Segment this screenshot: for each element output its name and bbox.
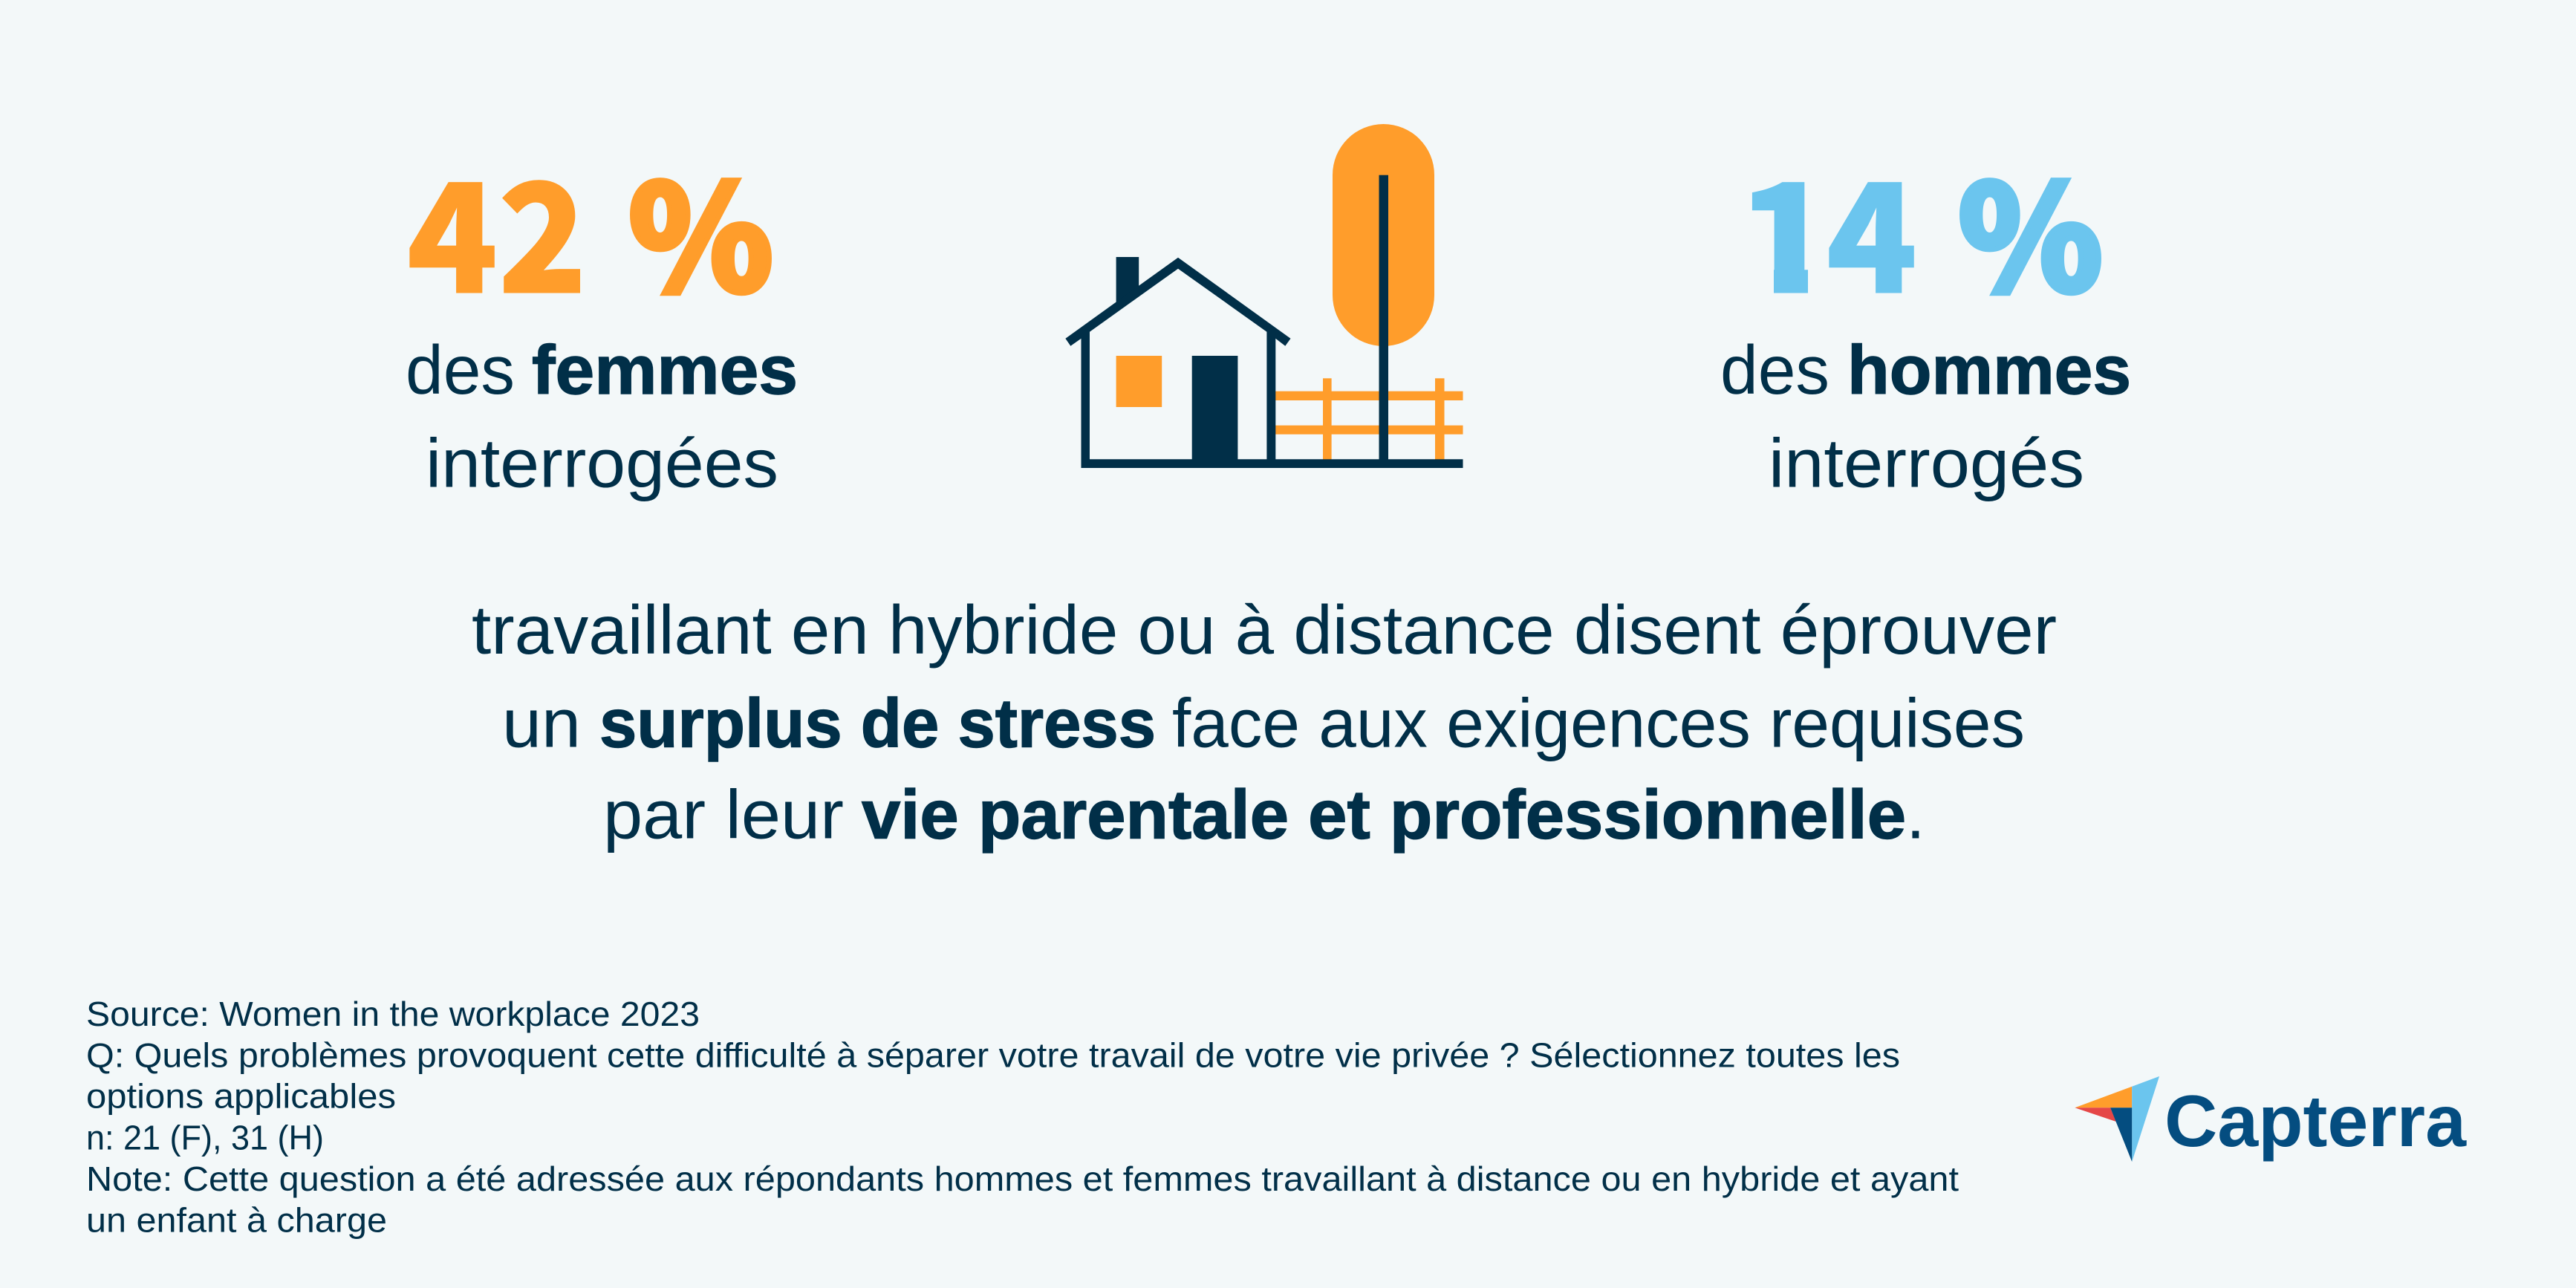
text: des hommes interrogés	[1720, 331, 2131, 502]
text block: main statement: face aux exigences requises	[1172, 685, 2025, 762]
text: des hommes interrogés: hommes	[1847, 331, 2131, 409]
text block: source notes: Q: Quels problèmes provoquent cette difficulté à séparer votre travail de votre vie privée ? Sélectionnez toutes les	[86, 1035, 1900, 1074]
stat: 42 %: 2	[498, 119, 587, 336]
stat: 42 %: %	[628, 121, 773, 334]
text: des femmes interrogées: des	[406, 331, 515, 409]
house outline	[1065, 257, 1463, 468]
text block: main statement: .	[1906, 775, 1925, 853]
logo mark	[2075, 1076, 2159, 1162]
stat: 14 %: 4	[1827, 119, 1917, 336]
text block: main statement	[472, 591, 2057, 853]
logo wordmark: Capterra	[2164, 1080, 2467, 1162]
text block: source notes: Note: Cette question a été adressée aux répondants hommes et femmes travaillant à distance ou en hybride et ayant	[86, 1159, 1959, 1198]
stat: 42 %: 4	[407, 119, 498, 336]
panel: men statistic	[1723, 178, 2129, 501]
text: des femmes interrogées	[406, 331, 798, 502]
text: des hommes interrogés: interrogés	[1769, 425, 2084, 502]
stat: 42 %	[407, 119, 773, 336]
panel: women statistic	[406, 119, 798, 502]
text block: main statement: par leur	[603, 775, 844, 853]
text block: main statement: surplus de stress	[599, 685, 1156, 762]
text block: source notes	[86, 995, 1959, 1239]
stat: 14 %: %	[1958, 121, 2103, 334]
window	[1116, 356, 1162, 407]
stat: 14 %	[1752, 178, 2101, 296]
text block: source notes: options applicables	[86, 1077, 396, 1116]
text: des femmes interrogées: interrogées	[426, 425, 778, 502]
door	[1192, 356, 1237, 460]
text block: main statement: vie parentale et professionnelle	[862, 775, 1906, 853]
text block: source notes: Source: Women in the workplace 2023	[86, 995, 700, 1033]
stat: 14 %: 1	[1737, 119, 1835, 336]
text block: source notes: n: 21 (F), 31 (H)	[86, 1119, 324, 1157]
logo: Capterra	[2075, 1076, 2467, 1162]
tree crown	[1333, 124, 1434, 346]
fence	[1275, 378, 1463, 460]
text block: source notes: un enfant à charge	[86, 1200, 387, 1239]
text: des hommes interrogés: des	[1720, 331, 1829, 409]
tree trunk	[1379, 175, 1388, 468]
icon: house with tree and fence	[1065, 124, 1463, 468]
text block: main statement: un	[502, 685, 581, 762]
text: des femmes interrogées: femmes	[532, 331, 798, 409]
text block: main statement: travaillant en hybride ou à distance disent éprouver	[472, 591, 2057, 669]
